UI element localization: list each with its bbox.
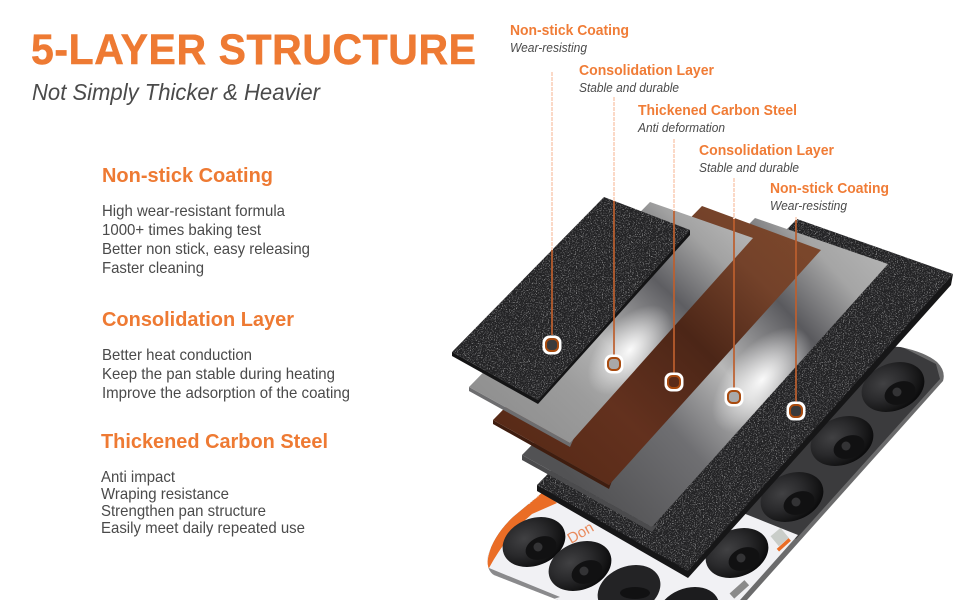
list: non-stick benefits: Better non stick, easy releasing <box>102 241 310 258</box>
callout: consolidation layer <box>579 63 714 95</box>
callout: consolidation layer lower: Consolidation Layer <box>699 143 834 159</box>
layer 2: upper consolidation layer <box>469 202 753 447</box>
pan orange band <box>487 492 557 568</box>
title: 5-LAYER STRUCTURE <box>31 25 476 73</box>
list: carbon steel benefits: Wraping resistance <box>101 486 229 503</box>
pan white label <box>488 490 798 600</box>
list: carbon steel benefits <box>101 469 305 537</box>
heading: consolidation layer: Consolidation Layer <box>102 309 294 331</box>
panel: non-stick coating description <box>102 165 310 277</box>
callout: thickened carbon steel <box>637 103 797 135</box>
panel: thickened carbon steel description <box>101 431 328 537</box>
marker: layer 1 <box>542 336 562 354</box>
callout: consolidation layer lower <box>699 143 834 175</box>
layer 3: thickened carbon steel <box>493 206 821 489</box>
layer 1: top non-stick coating <box>450 195 695 405</box>
callout: non-stick coating lower <box>770 181 889 213</box>
list: non-stick benefits: 1000+ times baking test <box>102 222 262 239</box>
heading: non-stick coating: Non-stick Coating <box>102 165 273 187</box>
callout: consolidation layer lower: Stable and durable <box>699 161 799 175</box>
list: carbon steel benefits: Easily meet daily repeated use <box>101 520 305 537</box>
pan dark section <box>746 346 940 539</box>
heading: thickened carbon steel: Thickened Carbon Steel <box>101 431 328 453</box>
list: carbon steel benefits: Anti impact <box>101 469 176 486</box>
callout: non-stick coating: Non-stick Coating <box>510 23 629 39</box>
list: consolidation benefits: Improve the adsorption of the coating <box>102 385 350 402</box>
pan brand text: CHEF MADE <box>525 479 557 507</box>
callout: non-stick coating lower: Wear-resisting <box>770 199 847 213</box>
layer 4: lower consolidation layer <box>522 218 888 532</box>
pan lower rim <box>488 568 560 598</box>
marker: layer 5 <box>786 402 806 420</box>
pan product name: Don <box>564 519 597 547</box>
callout: non-stick coating lower: Non-stick Coating <box>770 181 889 197</box>
list: consolidation benefits <box>102 347 350 402</box>
callout: consolidation layer: Stable and durable <box>579 81 679 95</box>
list: non-stick benefits: High wear-resistant formula <box>102 203 285 220</box>
baking pan <box>480 340 950 600</box>
subtitle: Not Simply Thicker & Heavier <box>32 79 321 105</box>
callout: consolidation layer: Consolidation Layer <box>579 63 714 79</box>
callout: non-stick coating <box>510 23 629 55</box>
pan rim <box>480 340 950 600</box>
callout: thickened carbon steel: Thickened Carbon Steel <box>638 103 797 119</box>
marker: layer 2 <box>604 354 624 374</box>
marker: layer 3 <box>664 372 684 392</box>
list: non-stick benefits <box>102 203 310 277</box>
list: consolidation benefits: Keep the pan stable during heating <box>102 366 335 383</box>
pan cavities <box>495 353 932 600</box>
callout: thickened carbon steel: Anti deformation <box>637 121 725 135</box>
panel: consolidation layer description <box>102 309 350 402</box>
callout: non-stick coating: Wear-resisting <box>510 41 587 55</box>
pan barcode <box>730 580 749 599</box>
pan orange tag <box>777 538 791 551</box>
list: consolidation benefits: Better heat conduction <box>102 347 252 364</box>
list: non-stick benefits: Faster cleaning <box>102 260 204 277</box>
list: carbon steel benefits: Strengthen pan structure <box>101 503 266 520</box>
callout leader lines <box>552 72 796 402</box>
marker: layer 4 <box>724 388 744 406</box>
pan qr patch <box>771 528 789 546</box>
layer 5: bottom non-stick coating <box>530 215 960 580</box>
